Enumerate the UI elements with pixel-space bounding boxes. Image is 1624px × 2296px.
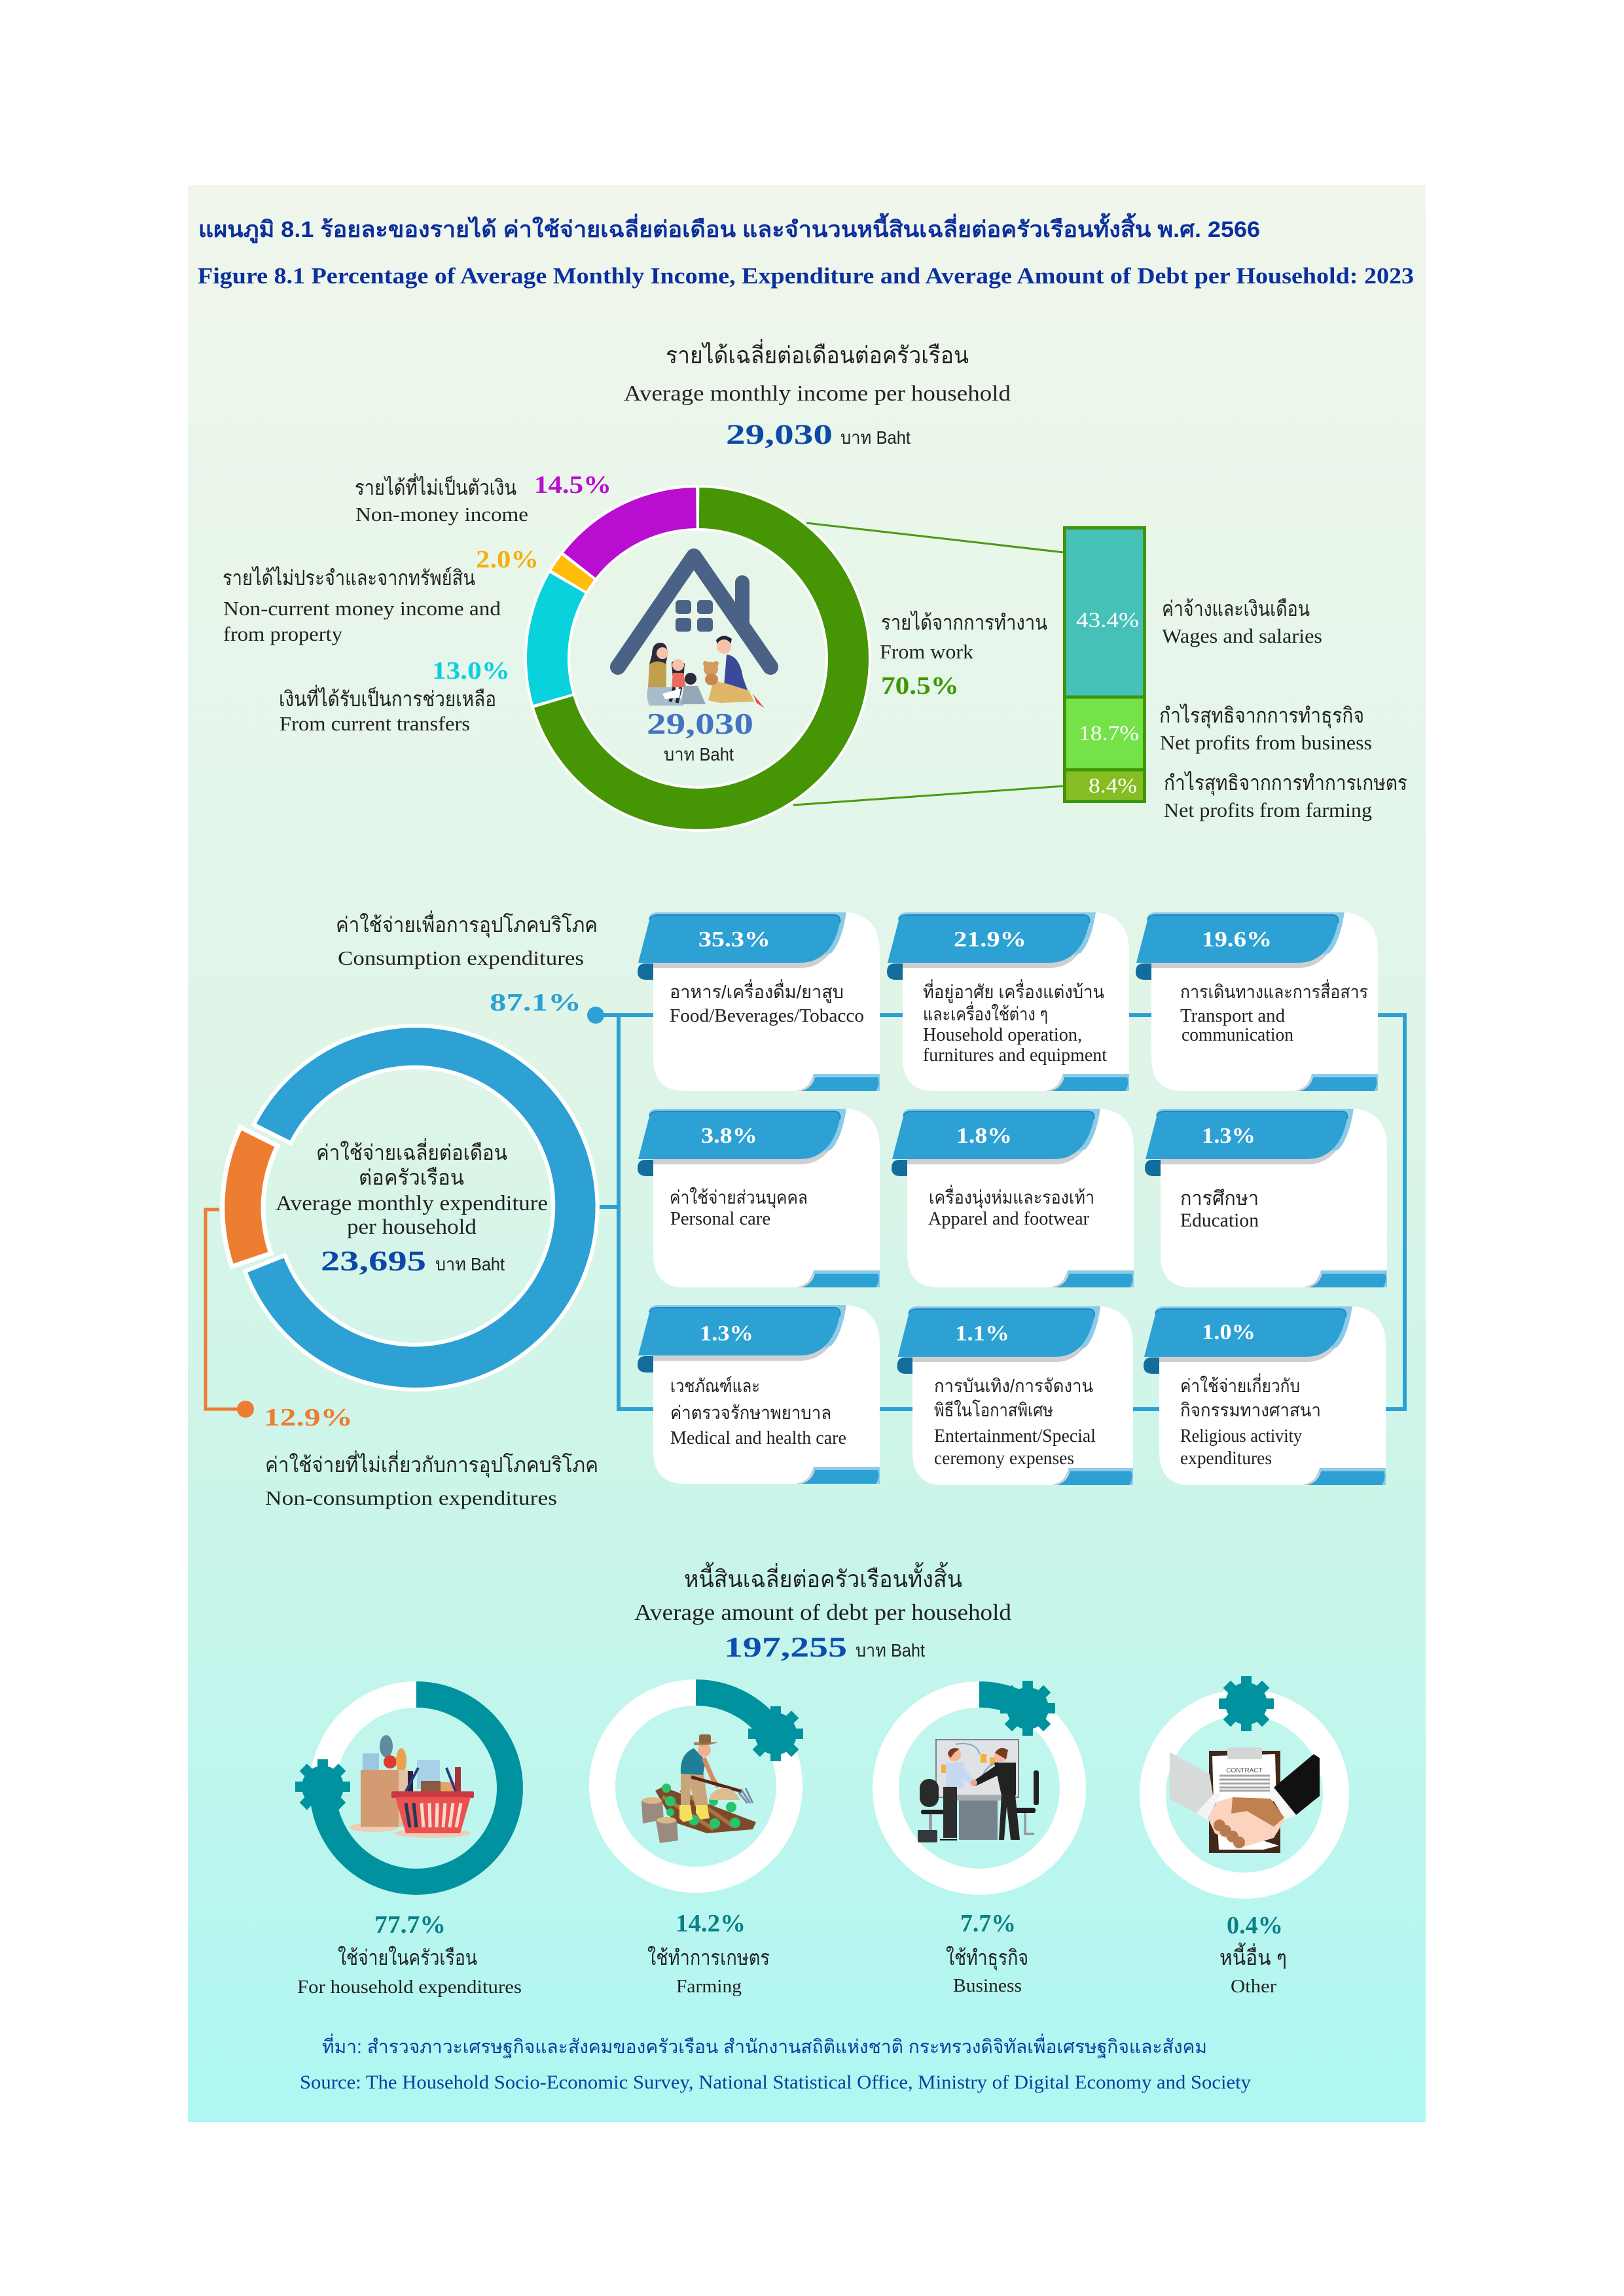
chart: stacked bar from work: 8.4%	[1089, 774, 1137, 798]
heading: average amount of debt: หนี้สินเฉลี่ยต่อครัวเรือนทั้งสิ้น	[684, 1562, 962, 1592]
card: medical: 1.3%	[700, 1321, 753, 1346]
card: religious: ค่าใช้จ่ายเกี่ยวกับ	[1180, 1373, 1300, 1396]
card: religious: expenditures	[1180, 1448, 1272, 1469]
label: current transfers: From current transfers	[280, 712, 470, 735]
label: business	[946, 1910, 1028, 1996]
chart: business debt ring	[886, 1681, 1073, 1882]
label: net profits from business: Net profits from business	[1160, 731, 1372, 754]
label: net profits from business	[1159, 704, 1372, 754]
card: medical	[638, 1305, 880, 1484]
title: แผนภูมิ 8.1 ร้อยละของรายได้ ค่าใช้จ่ายเฉลี่ยต่อเดือน และจำนวนหนี้สินเฉลี่ยต่อครัวเรือนทั้งสิ้น พ.ศ. 2566	[198, 213, 1260, 243]
label: wages and salaries: ค่าจ้างและเงินเดือน	[1162, 597, 1310, 620]
connector lines to stacked bar	[793, 523, 1064, 805]
center text: average monthly expenditure: Average monthly expenditure	[276, 1192, 548, 1215]
card: personal care: 3.8%	[701, 1124, 757, 1148]
card: food: Food/Beverages/Tobacco	[670, 1006, 864, 1026]
heading: average amount of debt: 197,255	[724, 1632, 847, 1663]
label: net profits from farming	[1164, 771, 1407, 821]
label: household expenditures: For household expenditures	[297, 1977, 522, 1998]
heading: average monthly income: รายได้เฉลี่ยต่อเดือนต่อครัวเรือน	[666, 339, 969, 368]
card: religious: 1.0%	[1202, 1320, 1255, 1344]
label: business: Business	[953, 1975, 1022, 1996]
center text: average monthly expenditure: ค่าใช้จ่ายเฉลี่ยต่อเดือน	[316, 1138, 507, 1164]
label: net profits from business: กำไรสุทธิจากการทำธุรกิจ	[1159, 704, 1364, 728]
card: medical: Medical and health care	[670, 1428, 846, 1448]
center value: income: 29,030	[647, 707, 753, 740]
center text: average monthly expenditure: 23,695	[321, 1246, 426, 1277]
label: non-money income: รายได้ที่ไม่เป็นตัวเงิน	[355, 473, 516, 499]
card: apparel: Apparel and footwear	[928, 1209, 1090, 1229]
label: non-current money income: รายได้ไม่ประจำและจากทรัพย์สิน	[223, 566, 475, 590]
label: other: หนี้อื่น ๆ	[1219, 1943, 1287, 1969]
label: current transfers: เงินที่ได้รับเป็นการช่วยเหลือ	[279, 685, 496, 711]
card: personal care: Personal care	[670, 1209, 770, 1229]
label: business: ใช้ทำธุรกิจ	[946, 1946, 1028, 1971]
label: current transfers: 13.0%	[432, 657, 510, 685]
card: household: และเครื่องใช้ต่าง ๆ	[923, 1001, 1048, 1024]
card: entertainment: พิธีในโอกาสพิเศษ	[934, 1399, 1053, 1420]
heading: average monthly income: บาท Baht	[840, 427, 911, 448]
label: other: Other	[1231, 1976, 1276, 1997]
card: apparel: 1.8%	[956, 1124, 1012, 1148]
label: non-consumption expenditures: ค่าใช้จ่ายที่ไม่เกี่ยวกับการอุปโภคบริโภค	[265, 1450, 598, 1478]
card: religious: กิจกรรมทางศาสนา	[1180, 1400, 1321, 1420]
title: Figure 8.1 Percentage of Average Monthly Income, Expenditure and Average Amount of Debt per Household: 2023	[198, 263, 1414, 289]
card: apparel: เครื่องนุ่งห่มและรองเท้า	[929, 1185, 1094, 1209]
label: income from work: From work	[880, 640, 974, 663]
card: education: 1.3%	[1202, 1124, 1255, 1148]
label: non-money income: 14.5%	[534, 471, 611, 499]
center value: income: บาท Baht	[664, 744, 734, 764]
label: non-money income	[355, 471, 611, 526]
card: religious	[1144, 1306, 1386, 1485]
card: food: 35.3%	[698, 927, 770, 952]
chart: income donut	[547, 508, 848, 809]
card: transport: communication	[1182, 1025, 1293, 1045]
card: apparel	[892, 1109, 1134, 1287]
card: household	[887, 912, 1129, 1091]
center value: income	[647, 707, 753, 764]
source note	[300, 2034, 1251, 2093]
label: household expenditures	[297, 1911, 522, 1998]
label: wages and salaries	[1162, 597, 1322, 647]
chart: stacked bar from work: 18.7%	[1079, 722, 1139, 745]
label: farming: ใช้ทำการเกษตร	[647, 1946, 770, 1969]
card: religious: Religious activity	[1180, 1426, 1302, 1446]
label: farming	[647, 1910, 770, 1997]
card: household: furnitures and equipment	[923, 1045, 1107, 1066]
heading: average amount of debt	[634, 1562, 1012, 1663]
label: non-current money income	[223, 546, 539, 645]
label: non-money income: Non-money income	[355, 503, 528, 526]
label: business: 7.7%	[960, 1910, 1016, 1937]
label: net profits from farming: Net profits from farming	[1164, 798, 1372, 821]
label: consumption expenditures: Consumption expenditures	[338, 946, 584, 969]
label: non-current money income: Non-current money income and	[223, 597, 501, 620]
label: other	[1219, 1912, 1287, 1997]
chart: stacked bar from work: 43.4%	[1076, 609, 1139, 632]
card: medical: เวชภัณฑ์และ	[670, 1376, 760, 1396]
icon: groceries	[350, 1735, 474, 1838]
heading: average amount of debt: บาท Baht	[856, 1640, 925, 1660]
icon: contract handshake: CONTRACT	[1226, 1767, 1263, 1774]
card: entertainment	[897, 1306, 1133, 1485]
label: household expenditures: ใช้จ่ายในครัวเรือน	[338, 1946, 477, 1969]
chart: stacked bar from work	[1064, 528, 1144, 801]
card: household: Household operation,	[923, 1025, 1082, 1045]
center text: average monthly expenditure: per household	[347, 1215, 477, 1239]
connector: non-consumption	[206, 1210, 254, 1418]
card: entertainment: ceremony expenses	[934, 1448, 1074, 1469]
title	[198, 213, 1414, 289]
label: wages and salaries: Wages and salaries	[1162, 624, 1322, 647]
label: income from work: รายได้จากการทำงาน	[881, 611, 1047, 634]
card: household: 21.9%	[954, 927, 1026, 952]
card: entertainment: 1.1%	[955, 1321, 1009, 1346]
chart: other debt ring	[1153, 1676, 1336, 1886]
card: transport: Transport and	[1180, 1006, 1285, 1026]
card: transport: 19.6%	[1202, 927, 1272, 952]
label: non-current money income: from property	[223, 622, 343, 645]
card: education: การศึกษา	[1180, 1188, 1259, 1210]
icon: business handshake	[918, 1740, 1039, 1842]
card: personal care	[638, 1109, 880, 1287]
card: education	[1145, 1109, 1387, 1287]
label: farming: 14.2%	[676, 1910, 746, 1937]
label: consumption expenditures: ค่าใช้จ่ายเพื่อการอุปโภคบริโภค	[336, 910, 598, 938]
label: current transfers	[279, 657, 510, 735]
card: personal care: ค่าใช้จ่ายส่วนบุคคล	[670, 1187, 808, 1209]
chart: household debt ring	[295, 1695, 510, 1882]
heading: average amount of debt: Average amount of debt per household	[634, 1600, 1012, 1625]
source note: Source: The Household Socio-Economic Survey, National Statistical Office, Ministry of Digital Economy and Society	[300, 2072, 1251, 2093]
label: income from work: 70.5%	[881, 672, 959, 700]
card: household: ที่อยู่อาศัย เครื่องแต่งบ้าน	[923, 979, 1104, 1003]
heading: average monthly income	[624, 339, 1011, 450]
label: non-consumption expenditures: 12.9%	[264, 1404, 353, 1431]
card: transport: การเดินทางและการสื่อสาร	[1180, 979, 1368, 1002]
heading: average monthly income: Average monthly income per household	[624, 382, 1011, 406]
chart: farming debt ring	[602, 1693, 803, 1880]
card: education: Education	[1180, 1210, 1259, 1231]
connector: consumption tree	[587, 1007, 1405, 1409]
label: consumption expenditures	[336, 910, 598, 1016]
card: entertainment: Entertainment/Special	[934, 1426, 1096, 1446]
chart: expenditure donut	[223, 1026, 598, 1390]
card: food: อาหาร/เครื่องดื่ม/ยาสูบ	[670, 979, 844, 1003]
label: household expenditures: 77.7%	[374, 1911, 446, 1939]
label: other: 0.4%	[1227, 1912, 1283, 1939]
card: food	[638, 912, 880, 1091]
label: consumption expenditures: 87.1%	[490, 989, 581, 1016]
card: transport	[1136, 912, 1378, 1091]
label: non-current money income: 2.0%	[476, 546, 539, 573]
icon: farmer	[641, 1734, 756, 1843]
background panel	[188, 185, 1426, 2122]
label: net profits from farming: กำไรสุทธิจากการทำการเกษตร	[1164, 771, 1407, 796]
card: entertainment: การบันเทิง/การจัดงาน	[934, 1376, 1093, 1396]
heading: average monthly income: 29,030	[726, 420, 833, 450]
source note: ที่มา: สำรวจภาวะเศรษฐกิจและสังคมของครัวเรือน สำนักงานสถิติแห่งชาติ กระทรวงดิจิทัลเพื่อเศรษฐกิจและสังคม	[322, 2034, 1207, 2058]
label: income from work	[880, 611, 1047, 700]
center text: average monthly expenditure: บาท Baht	[435, 1254, 505, 1274]
card: medical: ค่าตรวจรักษาพยาบาล	[670, 1403, 831, 1423]
label: non-consumption expenditures	[264, 1404, 598, 1509]
center text: average monthly expenditure	[276, 1138, 548, 1277]
label: farming: Farming	[676, 1976, 742, 1997]
icon: contract handshake	[1170, 1748, 1320, 1853]
label: non-consumption expenditures: Non-consumption expenditures	[265, 1486, 557, 1509]
center text: average monthly expenditure: ต่อครัวเรือน	[359, 1166, 464, 1189]
icon: house with family	[618, 556, 770, 708]
